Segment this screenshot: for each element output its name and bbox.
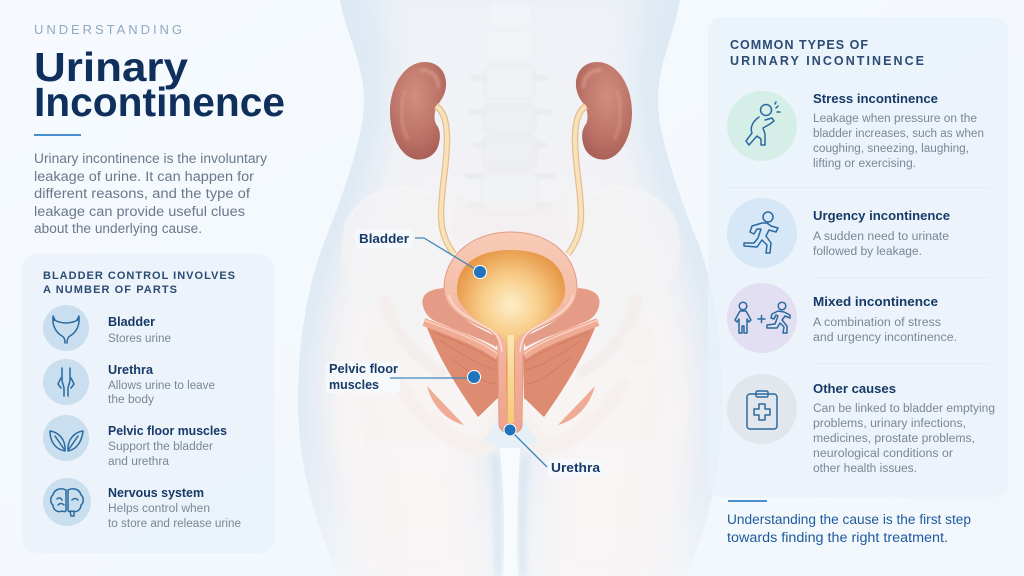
- anatomy illustration: [290, 0, 730, 576]
- item: pelvic floor muscles: and urethra: [108, 456, 170, 468]
- pubic shape: [480, 420, 540, 448]
- intro paragraph: Urinary incontinence is the involuntary: [34, 151, 267, 166]
- type: stress: coughing, sneezing, laughing,: [813, 143, 969, 155]
- item: urethra: Allows urine to leave: [108, 380, 215, 392]
- pelvic floor muscles: [422, 288, 600, 425]
- panel heading: [730, 38, 924, 68]
- intro paragraph: leakage can provide useful clues: [34, 204, 245, 219]
- type: other causes: medicines, prostate problems,: [813, 433, 975, 445]
- type: urgency: [727, 198, 950, 268]
- callout: bladder: [355, 229, 486, 278]
- type: other causes: problems, urinary infections,: [813, 418, 966, 430]
- panel: common types: [708, 17, 1008, 497]
- panel heading: BLADDER CONTROL INVOLVES: [43, 270, 235, 282]
- hip bones: [341, 188, 681, 576]
- divider: [728, 187, 990, 188]
- closing statement: Understanding the cause is the first step: [727, 512, 971, 527]
- callout: pelvic floor muscles: Pelvic floor: [329, 361, 398, 376]
- type: stress: lifting or exercising.: [813, 158, 916, 170]
- bladder: [444, 232, 577, 433]
- panel heading: COMMON TYPES OF: [730, 38, 868, 52]
- panel heading: URINARY INCONTINENCE: [730, 54, 924, 68]
- type: other causes: other health issues.: [813, 463, 917, 475]
- item: urethra: the body: [108, 394, 154, 406]
- item: bladder: [43, 305, 171, 351]
- panel heading: A NUMBER OF PARTS: [43, 284, 177, 296]
- inner thigh shadow: [494, 455, 526, 576]
- title: Urinary: [34, 44, 188, 90]
- callout: urethra: [504, 424, 604, 477]
- type: other causes: Other causes: [813, 381, 896, 396]
- title: [34, 44, 285, 125]
- type: urgency: A sudden need to urinate: [813, 231, 949, 243]
- item: nervous system: [43, 478, 241, 530]
- bladder lumen: [457, 250, 565, 422]
- lower pelvic arches: [432, 404, 498, 439]
- type: urgency: Urgency incontinence: [813, 208, 950, 223]
- item: pelvic floor muscles: Support the bladder: [108, 441, 213, 453]
- title: Incontinence: [34, 79, 285, 125]
- item: nervous system: Nervous system: [108, 485, 204, 500]
- intro paragraph: [34, 151, 267, 236]
- callout: pelvic floor muscles: muscles: [329, 377, 379, 392]
- intro paragraph: different reasons, and the type of: [34, 186, 250, 201]
- lower pelvic arches mirrored: [524, 404, 590, 439]
- item: bladder: Bladder: [108, 314, 155, 329]
- type: other causes: neurological conditions or: [813, 448, 953, 460]
- intro paragraph: leakage of urine. It can happen for: [34, 169, 255, 184]
- closing statement: towards finding the right treatment.: [727, 530, 948, 545]
- type: mixed: Mixed incontinence: [813, 294, 938, 309]
- item: pelvic floor muscles: [43, 415, 227, 468]
- closing statement: [727, 512, 971, 545]
- divider: [813, 363, 990, 364]
- item: bladder: Stores urine: [108, 333, 171, 345]
- eyebrow: UNDERSTANDING: [34, 22, 182, 37]
- type: stress: Leakage when pressure on the: [813, 113, 977, 125]
- icon: kidneys and ureters: [390, 62, 632, 254]
- panel heading: [43, 270, 235, 296]
- type: mixed: [727, 283, 957, 353]
- intro paragraph: about the underlying cause.: [34, 221, 202, 236]
- callout: bladder: Bladder: [359, 231, 409, 246]
- item: nervous system: Helps control when: [108, 503, 210, 515]
- type: stress: Stress incontinence: [813, 91, 938, 106]
- item: pelvic floor muscles: Pelvic floor muscles: [108, 423, 227, 438]
- type: stress: bladder increases, such as when: [813, 128, 984, 140]
- type: other causes: [727, 374, 995, 475]
- type: other causes: Can be linked to bladder emptying: [813, 403, 995, 415]
- type: urgency: followed by leakage.: [813, 246, 922, 258]
- closing rule: [728, 500, 767, 502]
- divider: [813, 277, 990, 278]
- urethra tube: [508, 335, 514, 423]
- item: urethra: [43, 359, 215, 406]
- item: nervous system: to store and release urine: [108, 518, 241, 530]
- translucent body silhouette: [298, 0, 712, 524]
- spine: [468, 0, 552, 214]
- item: urethra: Urethra: [108, 362, 154, 377]
- gap between thighs: [500, 448, 520, 576]
- callout: pelvic floor muscles: [326, 361, 480, 393]
- type: mixed: A combination of stress: [813, 317, 941, 329]
- callout: urethra: Urethra: [551, 460, 601, 475]
- type: stress: [727, 91, 984, 170]
- panel: bladder control: [22, 254, 274, 553]
- type: mixed: and urgency incontinence.: [813, 332, 957, 344]
- title rule: [34, 134, 81, 136]
